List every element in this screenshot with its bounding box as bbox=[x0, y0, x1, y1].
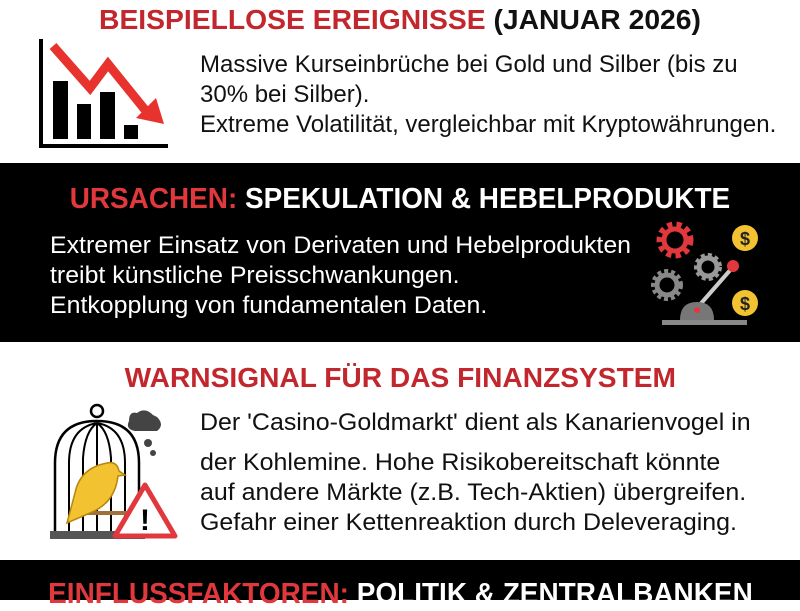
heading: influencing factors: EINFLUSSFAKTOREN: POLITIK & ZENTRALBANKEN bbox=[48, 578, 752, 610]
icon: gears and lever: $ bbox=[740, 229, 750, 249]
icon: falling bar chart bbox=[39, 39, 168, 148]
text block: warning bbox=[200, 409, 751, 536]
text block: events: 30% bei Silber). bbox=[200, 81, 369, 108]
text block: events bbox=[200, 51, 776, 138]
text block: causes: Extremer Einsatz von Derivaten und Hebelprodukten bbox=[50, 232, 631, 259]
text block: causes: treibt künstliche Preisschwankungen. bbox=[50, 262, 459, 289]
heading: causes: URSACHEN: SPEKULATION & HEBELPRODUKTE bbox=[70, 183, 730, 215]
text block: warning: der Kohlemine. Hohe Risikobereitschaft könnte bbox=[200, 449, 720, 476]
text block: events: Extreme Volatilität, vergleichbar mit Kryptowährungen. bbox=[200, 111, 776, 138]
text block: warning: Gefahr einer Kettenreaktion durch Deleveraging. bbox=[200, 509, 737, 536]
icon: gears and lever: $ bbox=[740, 294, 750, 314]
text block: warning: Der 'Casino-Goldmarkt' dient als Kanarienvogel in bbox=[200, 409, 751, 436]
text block: events: Massive Kurseinbrüche bei Gold und Silber (bis zu bbox=[200, 51, 738, 78]
text block: causes: Entkopplung von fundamentalen Daten. bbox=[50, 292, 487, 319]
icon: canary in cage bbox=[50, 404, 178, 539]
icon: canary in cage: ! bbox=[140, 504, 150, 537]
heading: warning: WARNSIGNAL FÜR DAS FINANZSYSTEM bbox=[124, 362, 676, 393]
panel: causes bbox=[0, 163, 800, 342]
icon: gears and lever bbox=[651, 222, 758, 325]
text block: warning: auf andere Märkte (z.B. Tech-Aktien) übergreifen. bbox=[200, 479, 746, 506]
panel: influencing factors bbox=[0, 560, 800, 600]
text block: causes bbox=[50, 232, 631, 319]
title: BEISPIELLOSE EREIGNISSE (JANUAR 2026) bbox=[99, 4, 701, 35]
